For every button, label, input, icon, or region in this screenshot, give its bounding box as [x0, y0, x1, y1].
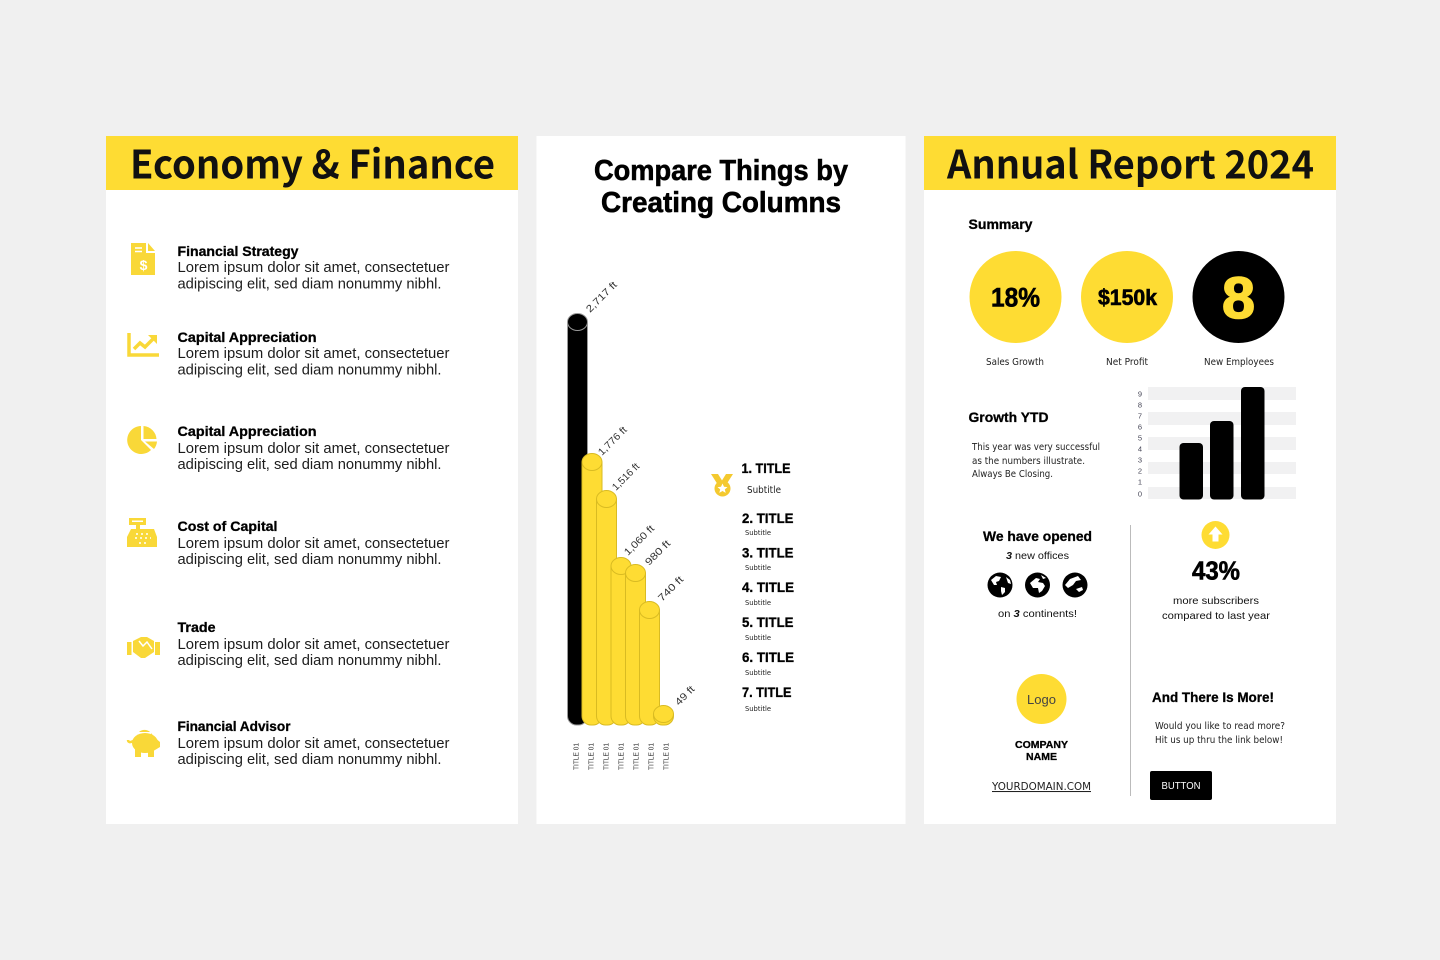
text block: more: Hit us up thru the link below! [1155, 735, 1283, 746]
list item: trade: Trade [178, 619, 216, 635]
stat: subscribers: more subscribers [1173, 595, 1259, 607]
list item: financial strategy: adipiscing elit, sed diam nonummy nibhl. [178, 276, 442, 292]
panel: economy and finance [106, 134, 518, 824]
icon: piggy bank [128, 730, 160, 757]
list item: trade [178, 619, 450, 669]
list item: capital appreciation second: adipiscing elit, sed diam nonummy nibhl. [178, 457, 442, 473]
chart: cylinder columns [568, 280, 698, 770]
header band: annual report: Annual Report 2024 [946, 134, 1314, 190]
text block: more: Would you like to read more? [1155, 721, 1285, 732]
text block: growth ytd: This year was very successful [971, 442, 1100, 453]
icon: handshake [127, 637, 160, 658]
axis labels: TITLE 01 [664, 743, 670, 770]
ranked list: Subtitle [745, 599, 771, 607]
list item: financial advisor: adipiscing elit, sed diam nonummy nibhl. [178, 752, 442, 768]
list item: capital appreciation second: Lorem ipsum dolor sit amet, consectetuer [178, 441, 450, 457]
ranked list: Subtitle [745, 564, 771, 572]
stat: sales growth: Sales Growth [986, 357, 1044, 368]
list item: cost of capital: adipiscing elit, sed diam nonummy nibhl. [178, 552, 442, 568]
list item: capital appreciation: adipiscing elit, sed diam nonummy nibhl. [178, 362, 442, 378]
ranked list: 7. TITLE [742, 684, 792, 700]
text block: new offices: We have opened [983, 528, 1092, 544]
column: 49 ft [654, 706, 674, 725]
icon: financial document [131, 243, 155, 275]
chart axis: 7 [1138, 412, 1142, 420]
axis labels: TITLE 01 [618, 743, 626, 770]
panel: compare columns [536, 136, 906, 824]
icon: financial document: $ [140, 257, 148, 273]
stat: net profit: $150k [1098, 285, 1158, 310]
company block: YOURDOMAIN.COM [991, 781, 1091, 793]
ranked list: 3. TITLE [742, 544, 794, 560]
list item: financial strategy: Lorem ipsum dolor sit amet, consectetuer [178, 260, 450, 276]
ranked list: 5. TITLE [742, 614, 794, 630]
text block: growth ytd: as the numbers illustrate. [972, 456, 1085, 467]
ranked list: Subtitle [745, 634, 771, 642]
column: black 2,717 ft [568, 314, 588, 725]
value labels: 1,060 ft [622, 523, 657, 558]
ranked list: 4. TITLE [742, 579, 794, 595]
list item: financial strategy: Financial Strategy [178, 243, 299, 259]
ranked list: 2. TITLE [742, 510, 794, 526]
text block: more [1152, 689, 1285, 746]
chart axis: 0 [1138, 490, 1142, 498]
ranked list: 1. TITLE [742, 460, 790, 476]
list item: financial advisor: Lorem ipsum dolor sit amet, consectetuer [178, 736, 450, 752]
value labels: 1,516 ft [610, 461, 642, 493]
stat: net profit [1081, 251, 1173, 368]
list item: financial strategy [178, 243, 450, 292]
list item: financial advisor [178, 718, 450, 768]
panel: annual report [924, 134, 1336, 824]
column: 1,516 ft [596, 490, 616, 725]
icon: rising line chart [129, 333, 159, 355]
bar chart: growth [1138, 387, 1296, 500]
axis labels: TITLE 01 [588, 743, 596, 770]
heading: summary: Summary [968, 216, 1033, 232]
axis labels: TITLE 01 [648, 743, 656, 770]
icon: pie chart [127, 426, 157, 454]
ranked list: Subtitle [745, 705, 771, 713]
chart axis: 9 [1138, 390, 1142, 398]
axis labels [574, 743, 670, 770]
stat: subscribers [1162, 521, 1271, 622]
stat: new employees [1192, 251, 1284, 368]
chart axis: 5 [1138, 434, 1142, 442]
column: 740 ft [640, 602, 660, 725]
chart axis: 4 [1138, 444, 1142, 454]
list item: capital appreciation: Capital Appreciation [178, 329, 316, 345]
button: BUTTON [1162, 781, 1200, 792]
value labels: 49 ft [673, 684, 698, 708]
value labels: 2,717 ft [584, 280, 620, 315]
axis labels: TITLE 01 [634, 743, 640, 770]
text block: more: And There Is More! [1152, 689, 1274, 705]
stat: subscribers: compared to last year [1162, 610, 1271, 622]
company block: COMPANY [1015, 739, 1068, 751]
axis labels: TITLE 01 [604, 743, 610, 770]
list item: capital appreciation second [178, 423, 450, 473]
ranked list: Subtitle [745, 529, 771, 537]
chart axis: 1 [1138, 478, 1142, 486]
icon: medal [711, 474, 733, 496]
text block: new offices [983, 528, 1092, 620]
button [1150, 771, 1212, 800]
icon: globe three [1062, 572, 1088, 598]
value labels: 740 ft [656, 574, 686, 604]
text block: new offices: on 3 continents! [998, 608, 1077, 620]
stat: new employees: 8 [1222, 266, 1255, 331]
chart axis: 6 [1138, 422, 1142, 432]
icon: cash register [127, 518, 157, 547]
ranked list: Subtitle [745, 669, 771, 677]
list item: capital appreciation: Lorem ipsum dolor sit amet, consectetuer [178, 346, 450, 362]
ranked list: Subtitle [747, 485, 781, 496]
stat: subscribers: 43% [1192, 556, 1240, 586]
heading: compare things: Creating Columns [601, 187, 841, 219]
stat: new employees: New Employees [1204, 357, 1274, 368]
heading: compare things: Compare Things by [594, 155, 848, 187]
list item: capital appreciation [178, 329, 450, 378]
text block: growth ytd [968, 409, 1100, 480]
text block: growth ytd: Growth YTD [968, 409, 1048, 425]
icon: globe two [1025, 572, 1050, 598]
ranked list [742, 460, 794, 713]
chart axis: 2 [1138, 466, 1142, 476]
column: 1,776 ft [582, 454, 602, 725]
company block: NAME [1026, 751, 1057, 763]
stat: net profit: Net Profit [1106, 357, 1148, 368]
column: 980 ft [626, 564, 646, 725]
value labels: 1,776 ft [596, 425, 630, 458]
header band: economy and finance: Economy & Finance [130, 134, 495, 190]
chart axis [1138, 390, 1142, 498]
text block: new offices: 3 new offices [1006, 550, 1069, 562]
list item: cost of capital: Cost of Capital [178, 518, 278, 534]
heading: compare things [594, 155, 848, 219]
value labels: 980 ft [643, 538, 673, 568]
axis labels: TITLE 01 [574, 743, 580, 770]
stat: sales growth: 18% [991, 282, 1040, 312]
list item: capital appreciation second: Capital Appreciation [178, 423, 316, 439]
list item: cost of capital [178, 518, 450, 568]
list item: trade: adipiscing elit, sed diam nonummy nibhl. [178, 653, 442, 669]
company block [991, 674, 1091, 793]
stat: sales growth [970, 251, 1062, 368]
chart axis: 8 [1138, 400, 1142, 410]
ranked list: 6. TITLE [742, 649, 794, 665]
list item: trade: Lorem ipsum dolor sit amet, consectetuer [178, 637, 450, 653]
value labels [584, 280, 698, 708]
list item: financial advisor: Financial Advisor [178, 718, 291, 734]
column: 1,060 ft [611, 558, 631, 725]
chart axis: 3 [1138, 456, 1142, 464]
text block: growth ytd: Always Be Closing. [972, 469, 1053, 480]
list item: cost of capital: Lorem ipsum dolor sit amet, consectetuer [178, 536, 450, 552]
company block: Logo [1027, 692, 1056, 707]
icon: globe one [988, 572, 1012, 598]
